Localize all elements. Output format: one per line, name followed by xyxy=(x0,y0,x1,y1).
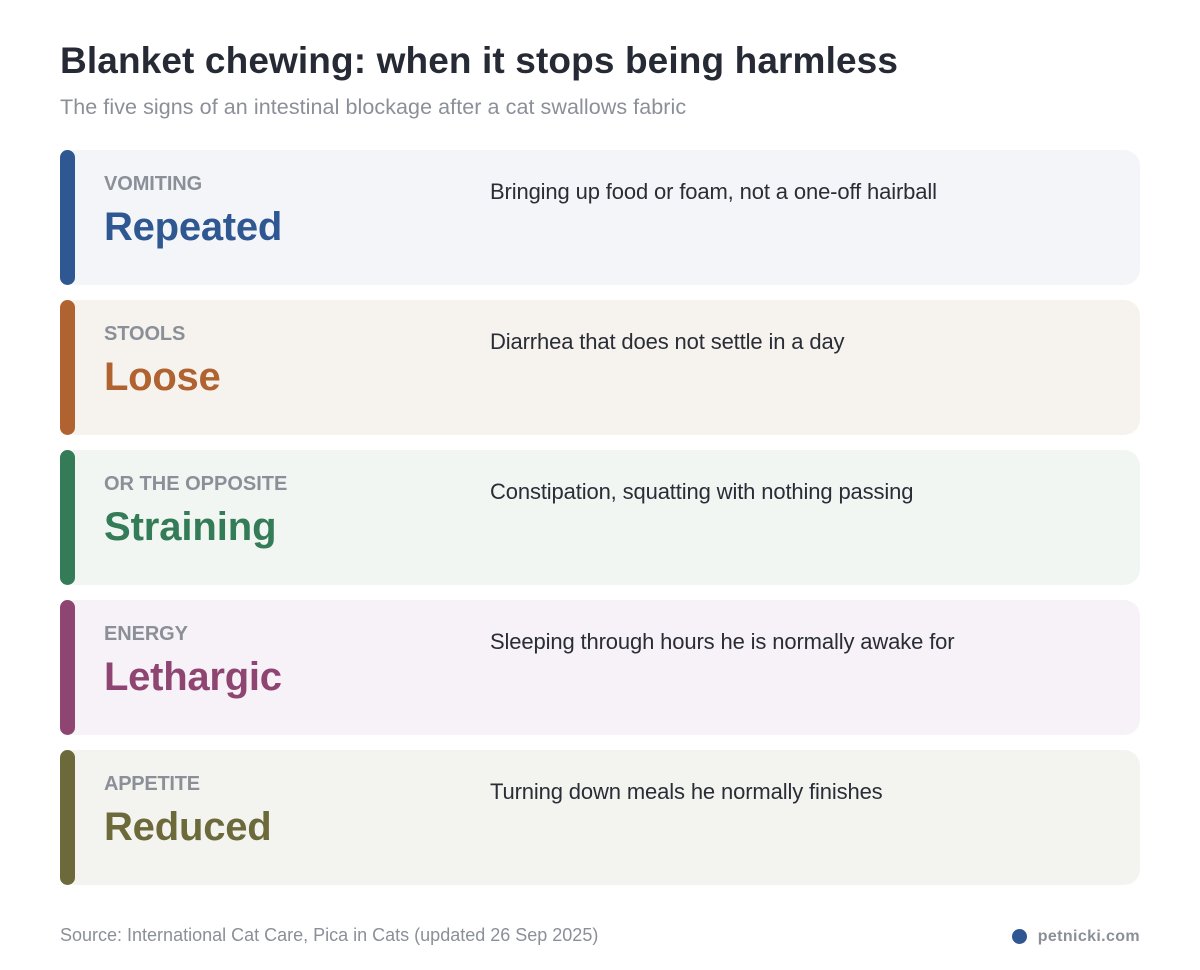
accent bar: energy xyxy=(60,600,75,735)
description: stools: Diarrhea that does not settle in a day xyxy=(490,329,844,354)
label: appetite: APPETITE xyxy=(104,773,200,795)
panel: or the opposite xyxy=(60,450,1140,585)
source note: Source: International Cat Care, Pica in Cats (updated 26 Sep 2025) xyxy=(60,925,598,945)
panel: vomiting xyxy=(60,150,1140,285)
panel: appetite xyxy=(60,750,1140,885)
accent bar: or the opposite xyxy=(60,450,75,585)
label: stools: STOOLS xyxy=(104,323,185,345)
description: or the opposite: Constipation, squatting with nothing passing xyxy=(490,479,913,504)
accent bar: stools xyxy=(60,300,75,435)
value: lethargic: Lethargic xyxy=(104,655,282,699)
icon: brand dot xyxy=(1012,929,1027,944)
value: repeated: Repeated xyxy=(104,205,282,249)
title: Blanket chewing: when it stops being harmless xyxy=(60,40,898,81)
accent bar: vomiting xyxy=(60,150,75,285)
subtitle: The five signs of an intestinal blockage after a cat swallows fabric xyxy=(60,95,686,119)
description: appetite: Turning down meals he normally finishes xyxy=(490,779,883,804)
value: loose: Loose xyxy=(104,355,221,399)
description: energy: Sleeping through hours he is normally awake for xyxy=(490,629,954,654)
label: or the opposite: OR THE OPPOSITE xyxy=(104,473,287,495)
description: vomiting: Bringing up food or foam, not a one-off hairball xyxy=(490,179,937,204)
value: straining: Straining xyxy=(104,505,276,549)
panel: stools xyxy=(60,300,1140,435)
brand mark xyxy=(1012,928,1140,945)
panel: energy xyxy=(60,600,1140,735)
label: vomiting: VOMITING xyxy=(104,173,202,195)
label: energy: ENERGY xyxy=(104,623,188,645)
brand name: petnicki.com xyxy=(1038,928,1140,945)
accent bar: appetite xyxy=(60,750,75,885)
value: reduced: Reduced xyxy=(104,805,272,849)
